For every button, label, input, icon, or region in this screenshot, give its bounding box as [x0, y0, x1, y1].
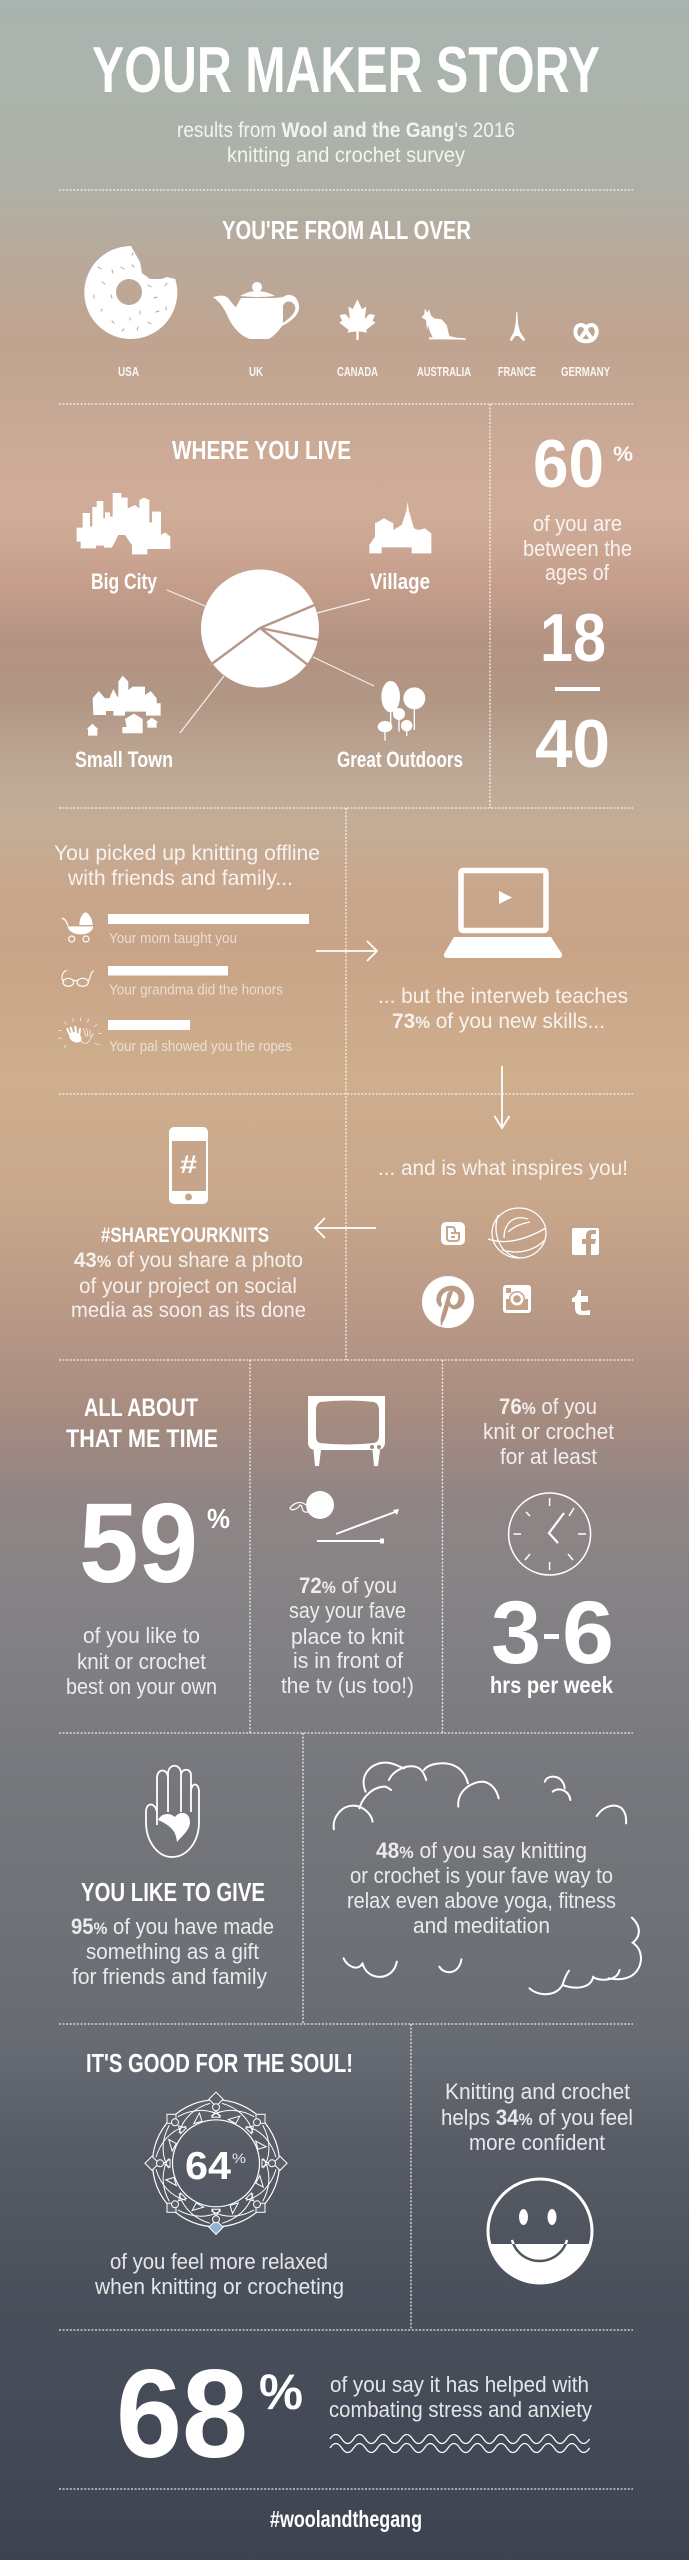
icon: phone: # [180, 1151, 197, 1179]
country labels: CANADA [337, 364, 378, 379]
text: on your own: of you like to [83, 1623, 200, 1648]
icon: waves [330, 2434, 590, 2452]
country labels [118, 364, 610, 379]
icon: high five hands [58, 1018, 102, 1048]
panel: cloud relax [334, 1763, 641, 1994]
hashtag footer: #woolandthegang [270, 2506, 422, 2532]
text: interweb teaches: ... but the interweb teaches [378, 984, 628, 1008]
panel: good for the soul [86, 2048, 353, 2299]
text: stress and anxiety: of you say it has helped with [330, 2372, 589, 2397]
text: in front of the tv: 72% of you [299, 1573, 397, 1598]
bar: mom [108, 914, 309, 924]
text: on your own: best on your own [66, 1674, 217, 1699]
text: gift for friends [71, 1914, 274, 1989]
stat: 3 to 6 [491, 1582, 614, 1682]
icon: hand with heart [146, 1766, 199, 1857]
text: feel more relaxed: of you feel more relaxed [110, 2249, 328, 2274]
text: you picked up knitting [54, 841, 320, 890]
icon: eiffel tower France [510, 312, 525, 341]
panel: all about that me time [66, 1394, 230, 1699]
bar: grandma [108, 966, 228, 976]
icon: pram [62, 912, 93, 942]
stat: 18 to 40: 18 [540, 600, 606, 676]
country labels: GERMANY [561, 364, 610, 379]
icon: pinterest [422, 1276, 474, 1328]
icon: blogger [441, 1222, 465, 1245]
text: on your own: knit or crochet [77, 1649, 206, 1674]
icon: clock [509, 1493, 591, 1575]
panel: confidence [441, 2079, 633, 2284]
subtitle [177, 119, 515, 167]
text: in front of the tv: the tv (us too!) [281, 1673, 414, 1698]
stat: 18 to 40 [535, 600, 610, 782]
text: in front of the tv: say your fave [289, 1598, 406, 1623]
label: village: Village [370, 569, 430, 594]
label: hrs per week: hrs per week [490, 1672, 613, 1698]
icon: village [369, 502, 431, 553]
icon: phone [169, 1127, 208, 1204]
text: gift for friends: 95% of you have made [71, 1914, 274, 1939]
panel: where you live [75, 435, 463, 772]
heading: IT'S GOOD FOR THE SOUL! [86, 2048, 353, 2078]
text: in front of the tv: place to knit [291, 1624, 404, 1649]
panel: interweb [378, 870, 628, 1033]
icon: yarn and needles [290, 1491, 399, 1544]
heading: YOU LIKE TO GIVE [81, 1877, 265, 1907]
text: you picked up knitting: with friends and family... [67, 866, 293, 890]
text: stress and anxiety: combating stress and anxiety [329, 2397, 592, 2422]
stat: 59 percent: 59 [79, 1480, 198, 1606]
text: on your own [66, 1623, 217, 1699]
panel: learning offline [54, 841, 320, 1055]
label: small town: Small Town [75, 747, 173, 772]
icon: donut USA [84, 246, 177, 339]
text: stress and anxiety [329, 2372, 592, 2422]
text: of you are between the ages of: between the [523, 536, 632, 561]
stat: 60 percent: 60 [533, 426, 604, 502]
icon: half-filled smiley [487, 2178, 593, 2284]
text: of you are between the ages of: ages of [545, 560, 610, 585]
stat: 18 to 40: 40 [535, 706, 610, 782]
text: feel more relaxed: when knitting or crocheting [94, 2274, 344, 2299]
text: share a photo: 43% of you share a photo [74, 1248, 303, 1272]
arrow: left [315, 1218, 376, 1238]
heading: THAT ME TIME [66, 1425, 218, 1453]
text: share a photo [71, 1248, 306, 1322]
panel: you like to give [71, 1766, 274, 1989]
panel: you're from all over [84, 215, 610, 379]
country labels: FRANCE [498, 364, 536, 379]
icon: maple leaf Canada [339, 299, 375, 340]
text: feel more confident: more confident [469, 2130, 605, 2155]
icon: tumblr [572, 1290, 590, 1315]
pie chart [201, 570, 319, 688]
panel: inspires [378, 1156, 628, 1328]
icon: trees [378, 681, 425, 741]
label: great outdoors: Great Outdoors [337, 747, 463, 772]
icon: tv [308, 1396, 385, 1466]
country labels: USA [118, 364, 139, 379]
stat: 68 percent: % [259, 2364, 303, 2420]
text: share a photo: media as soon as its done [71, 1298, 306, 1322]
text: 76 percent knit at least: knit or crochet [483, 1419, 614, 1444]
panel: share your knits [71, 1127, 306, 1322]
text: what inspires you: ... and is what inspires you! [378, 1156, 628, 1180]
label: pal: Your pal showed you the ropes [109, 1038, 292, 1055]
text: of you are between the ages of [523, 511, 632, 585]
icon: pretzel Germany [575, 325, 597, 341]
panel: tv [281, 1396, 414, 1698]
text: you picked up knitting: You picked up knitting offline [54, 841, 320, 865]
label: grandma: Your grandma did the honors [109, 982, 283, 998]
text: feel more confident [441, 2079, 633, 2155]
icon: glasses [62, 970, 94, 986]
country labels: UK [249, 364, 263, 379]
panel: 60 percent ages [523, 426, 633, 782]
heading: #SHAREYOURKNITS [101, 1224, 269, 1247]
mandala with 64 percent: % [232, 2150, 246, 2166]
panel: stress and anxiety [116, 2345, 592, 2484]
stat: 3 to 6: 3 [491, 1582, 541, 1682]
text: interweb teaches [378, 984, 628, 1033]
arrow: right [316, 941, 377, 961]
heading: WHERE YOU LIVE [172, 435, 351, 465]
subtitle: knitting and crochet survey [227, 144, 465, 167]
text: feel more confident: Knitting and crochet [445, 2079, 630, 2104]
text: share a photo: of your project on social [79, 1274, 297, 1298]
icon: kangaroo Australia [422, 308, 466, 340]
stat: 68 percent: 68 [116, 2345, 248, 2484]
text: gift for friends: something as a gift [86, 1939, 259, 1964]
text: interweb teaches: 73% of you new skills... [392, 1009, 605, 1033]
icon: facebook [572, 1228, 599, 1255]
bar: pal [108, 1020, 190, 1030]
arrow: down [494, 1066, 510, 1128]
stat: 3 to 6: 6 [562, 1582, 614, 1682]
text: fave way to relax [347, 1838, 616, 1938]
text: 76 percent knit at least: 76% of you [499, 1394, 597, 1419]
subtitle: results from Wool and the Gang's 2016 [177, 119, 515, 142]
stat: 60 percent: % [613, 443, 633, 466]
mandala with 64 percent [145, 2092, 287, 2234]
text: 76 percent knit at least: for at least [500, 1444, 597, 1469]
icon: small town [87, 676, 161, 736]
text: 76 percent knit at least [483, 1394, 614, 1469]
icon: cloud outline [334, 1763, 641, 1994]
icon: instagram [503, 1285, 531, 1313]
icon: laptop [444, 870, 562, 958]
mandala with 64 percent: 64 [185, 2145, 231, 2188]
leader lines [167, 590, 374, 733]
text: of you are between the ages of: of you are [533, 511, 622, 536]
country labels: AUSTRALIA [417, 364, 471, 379]
stat: 59 percent: % [207, 1503, 230, 1534]
text: fave way to relax: or crochet is your fave way to [350, 1863, 613, 1888]
heading: ALL ABOUT [84, 1394, 198, 1422]
text: feel more relaxed [94, 2249, 344, 2299]
text: in front of the tv: is in front of [293, 1648, 404, 1673]
icon: scribble circle [488, 1208, 546, 1258]
text: in front of the tv [281, 1573, 414, 1698]
heading: YOU'RE FROM ALL OVER [222, 215, 471, 245]
text: gift for friends: for friends and family [72, 1964, 267, 1989]
text: feel more confident: helps 34% of you feel [441, 2105, 633, 2130]
text: fave way to relax: relax even above yoga, fitness [347, 1888, 616, 1913]
panel: hours per week [483, 1394, 614, 1698]
text: fave way to relax: and meditation [413, 1913, 550, 1938]
label: mom: Your mom taught you [109, 930, 237, 947]
text: fave way to relax: 48% of you say knitting [376, 1838, 587, 1863]
heading [66, 1394, 218, 1453]
icon: teapot UK [213, 282, 299, 339]
icon: big city skyline [77, 493, 170, 554]
label: big city: Big City [91, 569, 158, 594]
